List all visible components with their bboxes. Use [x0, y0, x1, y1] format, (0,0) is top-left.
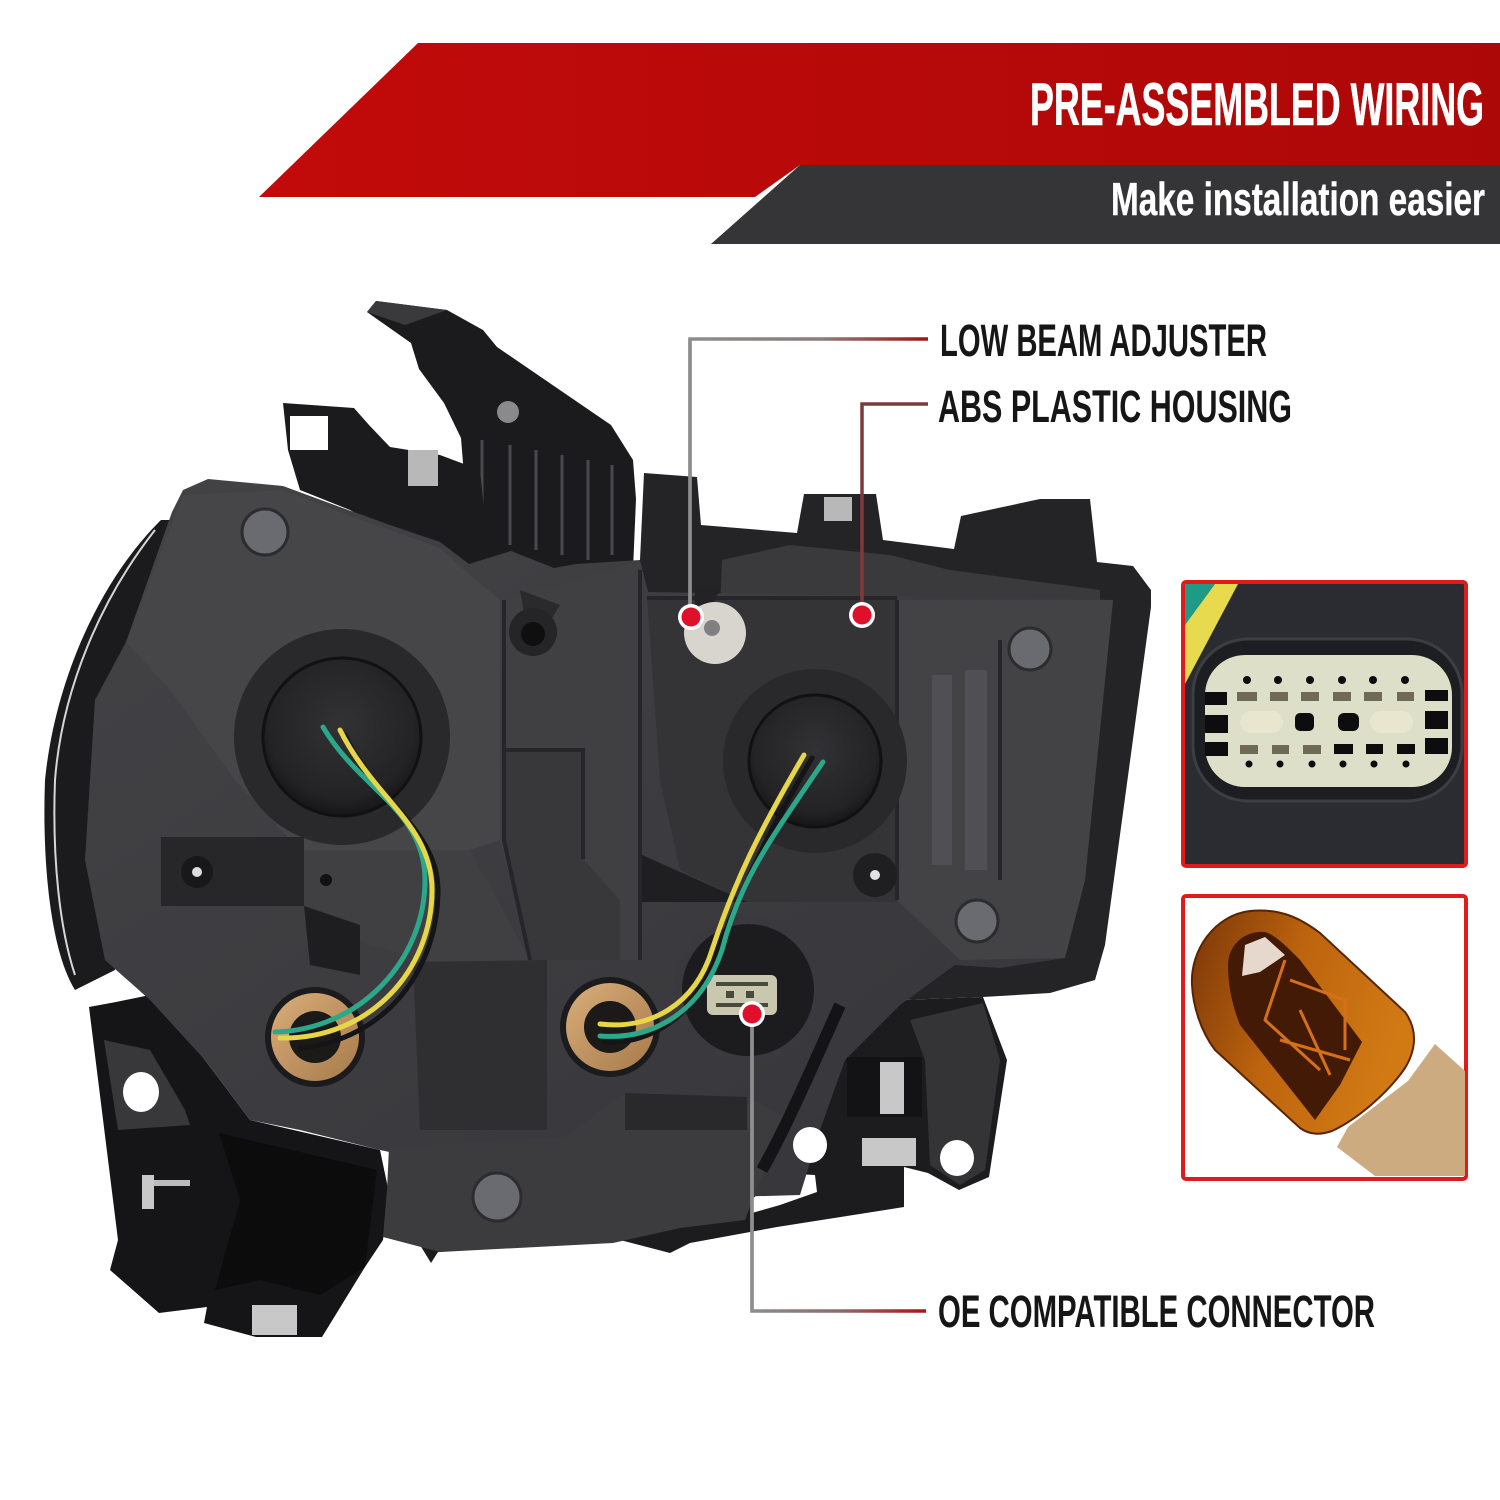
callout: abs plastic housing — [849, 381, 1292, 628]
top mount — [367, 301, 636, 570]
product: headlight rear view — [44, 301, 1151, 1337]
inset: amber bulb — [1183, 896, 1466, 1179]
black cable — [762, 1005, 840, 1170]
bulb socket: right — [560, 977, 660, 1077]
stud — [181, 856, 213, 888]
callout: low beam adjuster: LOW BEAM ADJUSTER — [940, 315, 1267, 366]
adjuster screw — [684, 590, 746, 664]
callout: abs plastic housing: ABS PLASTIC HOUSING — [938, 381, 1292, 432]
housing dark ribs — [504, 570, 1000, 960]
header banner: dark subheading — [711, 165, 1500, 244]
bulb interior — [1228, 932, 1362, 1120]
bulb highlight — [1242, 937, 1285, 976]
callout: oe compatible connector — [739, 1001, 1375, 1337]
lower block — [383, 1093, 790, 1252]
wiring harness — [275, 727, 823, 1048]
nut — [853, 853, 897, 897]
top tabs and rear structure — [283, 403, 490, 570]
header banner: red — [259, 43, 1500, 197]
screw post — [509, 590, 560, 656]
bulb base — [1337, 1044, 1465, 1176]
lower right bracket — [420, 997, 1007, 1263]
bulb socket: left — [265, 987, 365, 1087]
bulb glass — [1192, 910, 1414, 1134]
lens edge — [44, 520, 172, 990]
main housing — [85, 479, 1113, 1200]
inset: connector close-up — [1183, 582, 1466, 866]
dust cap: right — [723, 669, 907, 853]
callout: low beam adjuster — [678, 315, 1267, 630]
raised panels — [126, 490, 500, 850]
dust cap: left — [234, 629, 450, 845]
mount plugs — [242, 509, 1051, 1221]
metal clips — [142, 1057, 922, 1335]
lower left bracket — [89, 995, 389, 1337]
connector port — [674, 916, 822, 1064]
mounting holes — [123, 1072, 974, 1176]
bulb filament — [1265, 960, 1350, 1075]
